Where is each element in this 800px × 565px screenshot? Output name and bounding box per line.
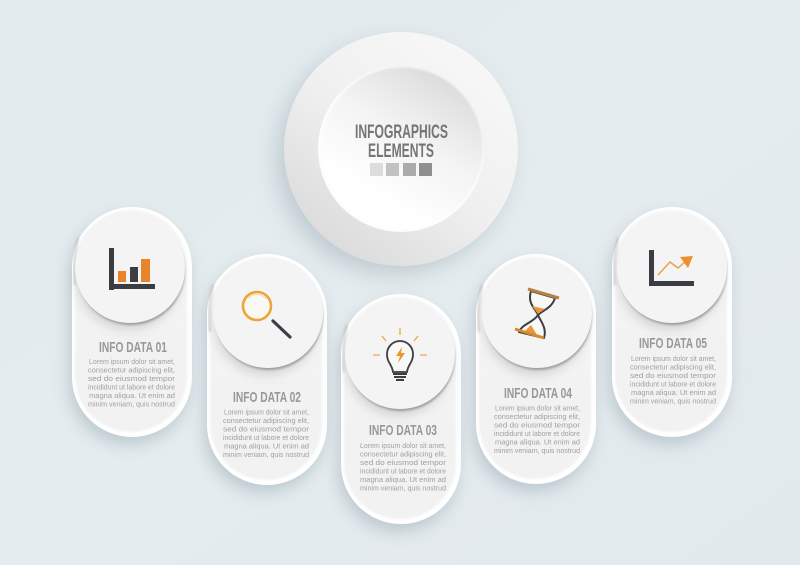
body text: Lorem ipsum dolor sit amet, — [224, 410, 309, 416]
body text: incididunt ut labore et dolore — [223, 435, 309, 442]
body text: consectetur adipiscing elit, — [88, 368, 175, 374]
body text — [88, 359, 176, 408]
body text: incididunt ut labore et dolore — [494, 431, 580, 438]
body text: sed do eiusmod tempor — [494, 422, 581, 430]
body text: incididunt ut labore et dolore — [88, 384, 175, 392]
body text: sed do eiusmod tempor — [630, 373, 717, 380]
icon: line chart — [652, 250, 694, 284]
body text: magna aliqua. Ut enim ad — [495, 440, 580, 446]
body text — [630, 356, 717, 406]
title: INFOGRAPHICS — [355, 122, 448, 143]
heading: INFO DATA 03 — [369, 422, 437, 439]
body text: consectetur adipiscing elit, — [494, 414, 580, 421]
body text: magna aliqua. Ut enim ad — [224, 444, 309, 450]
body text: consectetur adipiscing elit, — [360, 452, 446, 458]
body text: consectetur adipiscing elit, — [223, 418, 309, 425]
body text: consectetur adipiscing elit, — [630, 364, 716, 372]
title: ELEMENTS — [368, 141, 434, 162]
body text: Lorem ipsum dolor sit amet, — [89, 359, 175, 366]
panel: info data 02 — [204, 254, 327, 493]
panel: central circle — [277, 32, 518, 274]
body text: magna aliqua. Ut enim ad — [89, 393, 175, 400]
heading: INFO DATA 05 — [639, 335, 707, 352]
panel: info data 01 — [69, 207, 192, 445]
body text: magna aliqua. Ut enim ad — [631, 390, 716, 397]
body text: minim veniam, quis nostrud — [223, 452, 309, 459]
body text: minim veniam, quis nostrud — [360, 486, 446, 492]
icon: hourglass — [515, 289, 559, 338]
body text: sed do eiusmod tempor — [223, 426, 310, 434]
panel: info data 05 — [609, 207, 732, 445]
heading: INFO DATA 04 — [504, 385, 572, 402]
body text: Lorem ipsum dolor sit amet, — [631, 356, 716, 363]
icon: magnifying glass — [243, 292, 290, 337]
body text: Lorem ipsum dolor sit amet, — [495, 406, 580, 412]
body text: Lorem ipsum dolor sit amet, — [360, 443, 446, 450]
body text: sed do eiusmod tempor — [88, 376, 176, 383]
panel: info data 04 — [473, 254, 596, 492]
icon: light bulb — [373, 328, 427, 380]
title — [355, 122, 448, 162]
body text: minim veniam, quis nostrud — [88, 402, 175, 408]
icon: bar chart — [109, 248, 155, 290]
heading: INFO DATA 01 — [99, 339, 167, 356]
body text: incididunt ut labore et dolore — [360, 468, 446, 476]
body text — [223, 410, 310, 459]
body text — [494, 406, 581, 455]
color swatches — [370, 163, 432, 176]
panel: info data 03 — [338, 294, 461, 532]
body text: incididunt ut labore et dolore — [630, 382, 716, 388]
body text — [360, 443, 447, 492]
body text: sed do eiusmod tempor — [360, 460, 447, 467]
body text: minim veniam, quis nostrud — [494, 448, 580, 455]
body text: minim veniam, quis nostrud — [630, 398, 716, 406]
heading: INFO DATA 02 — [233, 389, 301, 406]
body text: magna aliqua. Ut enim ad — [360, 477, 446, 484]
